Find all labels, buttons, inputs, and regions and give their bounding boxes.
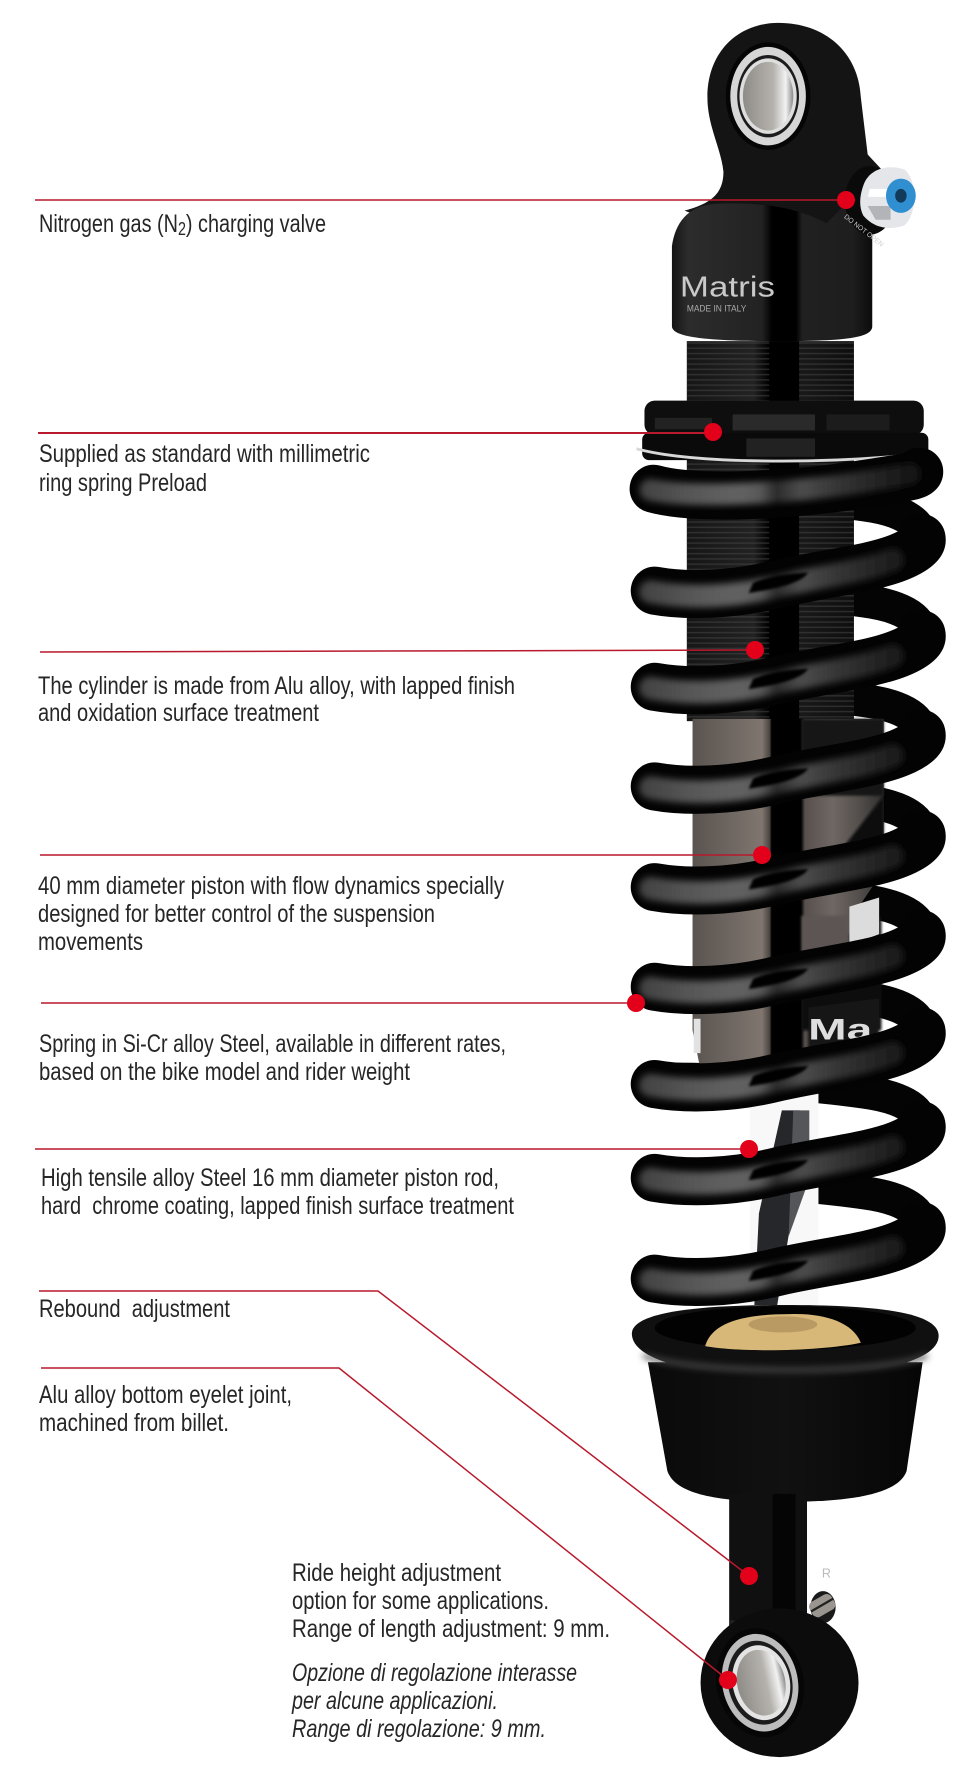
leader lines [35,200,846,1680]
valve warning: DO NOT OPEN [842,214,885,249]
text: piston rod: hard chrome coating, lapped finish surface treatment [41,1192,514,1220]
top eyelet [685,23,884,229]
text: piston: designed for better control of the suspension [38,900,435,928]
leader: rebound adjustment [39,1291,749,1576]
bump stop [705,1314,861,1350]
text: preload: ring spring Preload [39,469,207,497]
text: cylinder: and oxidation surface treatment [38,699,319,727]
text: spring: Spring in Si-Cr alloy Steel, available in different rates, [39,1030,506,1058]
text: bottom eyelet: Alu alloy bottom eyelet joint, [39,1381,292,1409]
bottom eyelet [701,1608,859,1757]
text: ride height English: option for some applications. [292,1587,549,1615]
dot: preload [704,423,722,441]
text: piston: movements [38,928,143,956]
text: bottom eyelet: machined from billet. [39,1409,229,1437]
smooth cylinder tube [693,719,884,1070]
text: cylinder: The cylinder is made from Alu alloy, with lapped finish [38,672,515,700]
leader: piston rod [35,1148,749,1150]
text: piston: 40 mm diameter piston with flow dynamics specially [38,872,504,900]
text: ride height Italian [291,1659,577,1743]
leader: nitrogen valve [35,199,846,201]
dot: rebound [740,1567,758,1585]
text: ride height English [292,1559,610,1643]
text: bottom eyelet [39,1381,292,1437]
spring back strands [655,492,921,1226]
text: cylinder [38,672,515,727]
dot: piston [753,846,771,864]
text: preload: Supplied as standard with millimetric [39,440,370,468]
text: piston rod [41,1164,514,1220]
text: ride height Italian: per alcune applicazioni. [291,1687,498,1715]
charging valve [842,166,916,249]
shock absorber illustration [632,23,939,1757]
made in italy: MADE IN ITALY [687,303,746,313]
leader: piston [40,854,762,856]
threaded cylinder [687,341,854,721]
leader: cylinder [40,650,755,652]
preload rings [636,401,928,461]
eyelet bearing [726,42,810,150]
text: piston [38,872,504,956]
logo: Matris [680,271,775,303]
text: nitrogen valve: 2 [178,219,186,239]
dot: rod [740,1140,758,1158]
rebound adjuster [807,1566,837,1623]
text: piston rod: High tensile alloy Steel 16 mm diameter piston rod, [41,1164,499,1192]
rebound adjuster: R [822,1566,831,1580]
reservoir head [672,197,872,341]
lower spring cup [632,1305,939,1502]
dot: eyelet [719,1671,737,1689]
valve cap [886,179,916,213]
leader: bottom eyelet [41,1368,728,1680]
spring front coils [650,472,922,1284]
leader: preload ring [38,432,713,434]
dot: spring [627,994,645,1012]
text: preload [39,440,370,497]
text: spring: based on the bike model and rider weight [39,1058,410,1086]
text: ride height Italian: Range di regolazione: 9 mm. [292,1715,546,1743]
leader: spring [41,1002,636,1004]
callout dots [627,191,855,1689]
text: nitrogen valve: Nitrogen gas (N [39,210,214,238]
text: nitrogen valve: ) charging valve [186,210,326,238]
text: ride height English: Range of length adjustment: 9 mm. [292,1615,610,1643]
decal: Matris logo fragment: Ma [808,1013,873,1046]
text: ride height English: Ride height adjustment [292,1559,501,1587]
piston rod [750,1065,818,1305]
text: rebound: Rebound adjustment [39,1295,230,1323]
text: ride height Italian: Opzione di regolazione interasse [292,1659,577,1687]
lower stem [729,1494,807,1660]
text: spring [39,1030,506,1086]
dot: valve [837,191,855,209]
dot: cylinder [746,641,764,659]
